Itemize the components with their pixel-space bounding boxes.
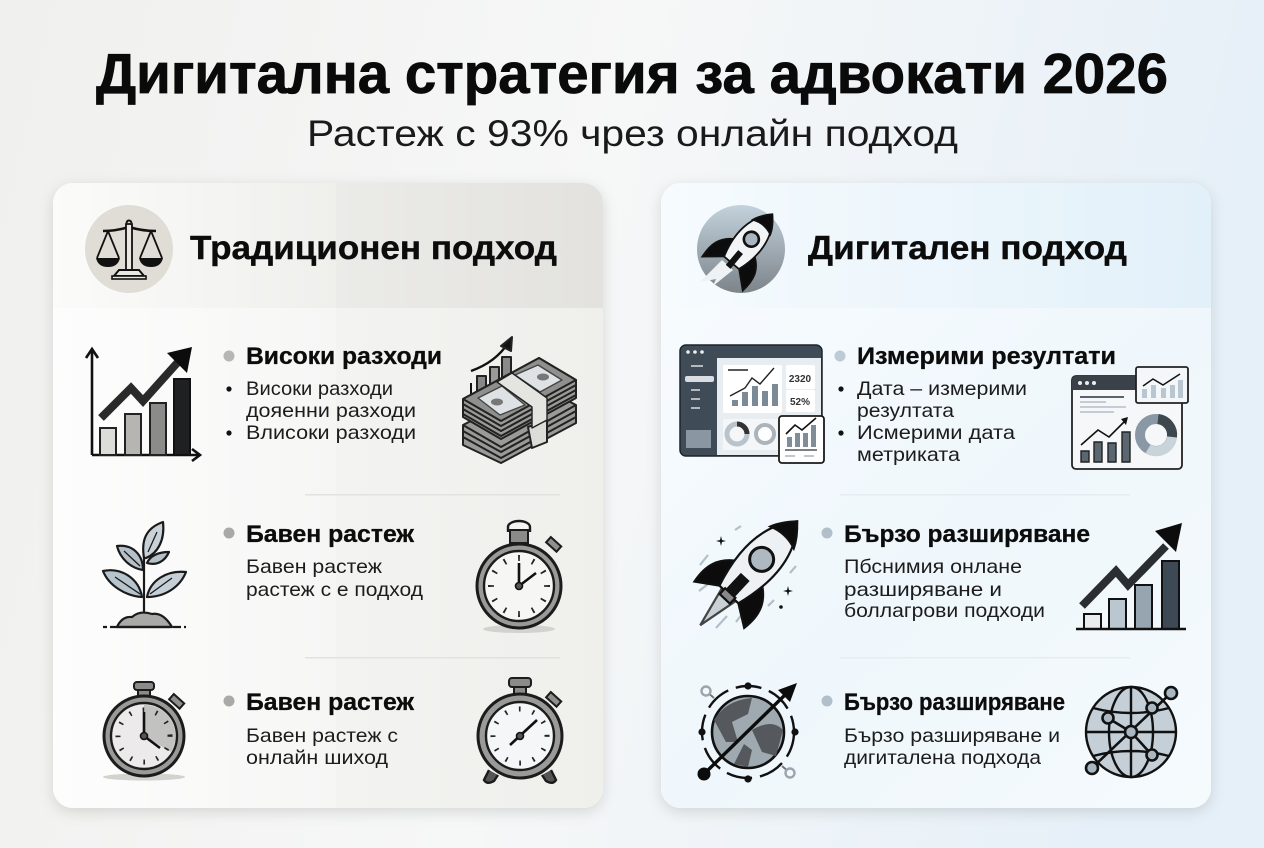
text: measurable results: Измерими резултати <box>857 343 1116 370</box>
title: Дигитална стратегия за адвокати 2026 <box>96 42 1168 106</box>
text: slow growth: растеж с е подход <box>246 579 424 601</box>
icon: stopwatch with sector <box>103 682 185 780</box>
text: slow growth second: Бавен растеж с <box>246 725 398 747</box>
icon: dashboard <box>680 345 824 463</box>
icon: dashboard: 52% <box>790 397 810 408</box>
text: slow growth second: Бавен растеж <box>246 689 415 716</box>
text: slow growth second <box>224 689 415 769</box>
text: measurable results <box>834 343 1116 466</box>
text: measurable results: Исмерими дата <box>857 422 1015 444</box>
text: rapid expansion second: Бързо разширяване и <box>844 725 1060 747</box>
text: rapid expansion second: дигиталена подхода <box>844 747 1041 769</box>
icon: dashboard: 2320 <box>789 374 812 385</box>
icon: globe with arrow <box>698 682 799 783</box>
text: slow growth second: онлайн шиход <box>246 747 389 769</box>
text: slow growth <box>224 521 424 601</box>
text: measurable results: Дата – измерими <box>857 378 1027 400</box>
panel: digital approach <box>661 183 1211 808</box>
icon: rocket launch <box>675 497 823 649</box>
text: rapid expansion: Пбснимия онлане <box>844 556 1022 578</box>
text: measurable results: метриката <box>857 444 960 466</box>
text: high costs: Влисоки разходи <box>246 422 416 444</box>
heading: digital approach: Дигитален подход <box>808 229 1127 266</box>
icon: growth bars <box>1076 523 1186 629</box>
icon: network globe <box>1086 687 1177 777</box>
icon: sprout <box>103 522 186 627</box>
icon: rocket badge <box>697 197 793 293</box>
icon: stopwatch <box>477 521 561 633</box>
text: rapid expansion: разширяване и <box>844 579 1002 601</box>
text: rapid expansion <box>822 521 1090 622</box>
text: rapid expansion: боллагрови подходи <box>844 600 1045 622</box>
icon: scales of justice <box>85 205 173 293</box>
text: rapid expansion second: Бързо разширяване <box>844 689 1065 716</box>
panel: traditional approach <box>53 183 603 808</box>
text: high costs: Високи разходи <box>246 343 442 370</box>
heading: traditional approach: Традиционен подход <box>190 229 557 266</box>
icon: alarm clock <box>478 678 562 783</box>
icon: stacks of money <box>463 337 576 463</box>
text: high costs <box>224 343 442 444</box>
text: high costs: Високи разходи <box>246 378 393 400</box>
text: slow growth: Бавен растеж <box>246 556 382 578</box>
text: slow growth: Бавен растеж <box>246 521 415 548</box>
text: high costs: дояенни разходи <box>246 400 416 422</box>
icon: rising bar chart <box>86 347 200 461</box>
text: rapid expansion second <box>822 689 1065 769</box>
subtitle: Растеж с 93% чрез онлайн подход <box>307 113 958 154</box>
text: measurable results: резултата <box>857 400 954 422</box>
icon: analytics window <box>1072 367 1188 469</box>
text: rapid expansion: Бързо разширяване <box>844 521 1090 548</box>
